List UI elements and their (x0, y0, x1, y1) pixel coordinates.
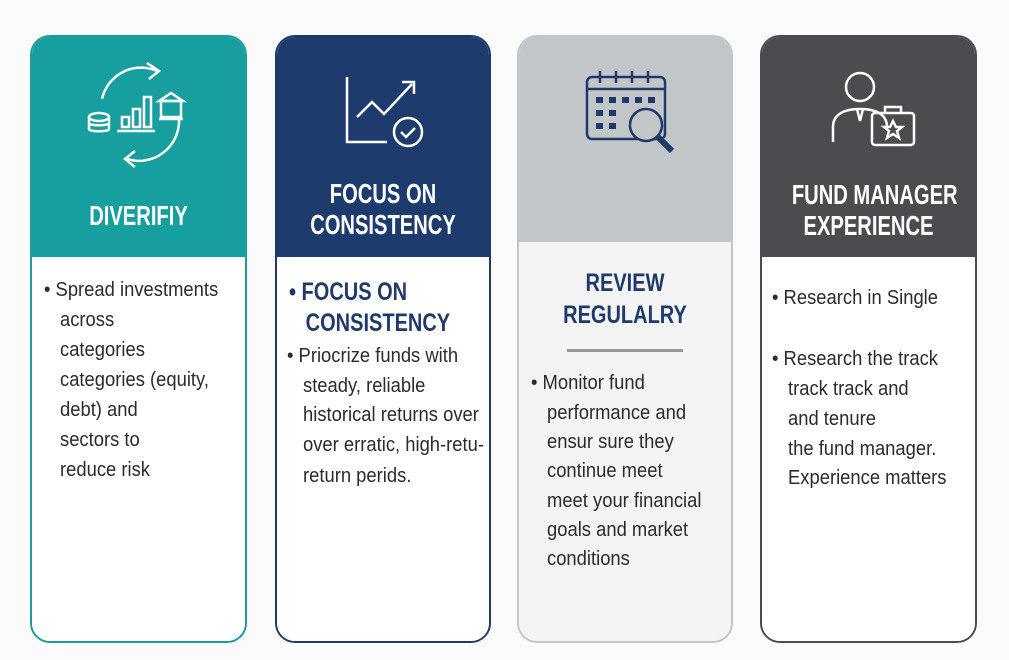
header: diversify (32, 37, 245, 257)
text: consistency body: return perids. (303, 465, 411, 487)
text: diversify body: across (60, 309, 114, 331)
text: fund manager body (762, 257, 975, 641)
text: review body: performance and (547, 402, 686, 424)
text: review body: conditions (547, 548, 630, 570)
icon: calendar magnifier (586, 71, 674, 154)
title: fund manager experience: EXPERIENCE (804, 210, 933, 241)
text: diversify body: • Spread investments (44, 279, 218, 301)
text: consistency body (277, 257, 489, 641)
panel: fund manager (760, 35, 977, 643)
title: focus on consistency: CONSISTENCY (310, 209, 456, 240)
text: review body: meet your financial (547, 490, 701, 512)
text: consistency body: • FOCUS ON (289, 278, 407, 306)
text: review body: ensur sure they (547, 431, 674, 453)
panel: diversify (30, 35, 247, 643)
text: diversify body: reduce risk (60, 459, 150, 481)
text: review body: REGULALRY (563, 301, 687, 329)
text: fund manager body: and tenure (788, 408, 876, 430)
title: focus on consistency: FOCUS ON (330, 178, 436, 209)
text: diversify body: categories (60, 339, 145, 361)
text: fund manager body: • Research in Single (772, 287, 938, 309)
text: consistency body: • Priocrize funds with (287, 345, 458, 367)
title: focus on consistency (310, 178, 456, 240)
icon: diversify cycle (88, 62, 187, 168)
title: diverifiy: DIVERIFIY (89, 200, 188, 231)
icon: manager with briefcase (832, 72, 916, 146)
header: review (519, 37, 731, 242)
text: fund manager body: Experience matters (788, 467, 947, 489)
title: fund manager experience: FUND MANAGER (792, 179, 958, 210)
text: consistency body: over erratic, high-retu- (303, 434, 484, 456)
text: consistency body: steady, reliable (303, 375, 425, 397)
text: consistency body: CONSISTENCY (306, 309, 450, 337)
panel: consistency (275, 35, 491, 643)
text: diversify body (32, 257, 245, 641)
text: fund manager body: track track and (788, 378, 909, 400)
header: consistency (277, 37, 489, 257)
text: review body (519, 242, 731, 641)
title: fund manager experience (792, 179, 958, 241)
text: diversify body: categories (equity, (60, 369, 209, 391)
text: diversify body: sectors to (60, 429, 140, 451)
text: consistency body: historical returns over (303, 404, 479, 426)
header: fund manager (762, 37, 975, 257)
text: fund manager body: the fund manager. (788, 438, 936, 460)
text: diversify body: debt) and (60, 399, 138, 421)
panel: review (517, 35, 733, 643)
text: review body: REVIEW (586, 269, 664, 297)
text: review body: • Monitor fund (531, 372, 645, 394)
text: fund manager body: • Research the track (772, 348, 938, 370)
text: review body: goals and market (547, 519, 688, 541)
text: review body: continue meet (547, 460, 663, 482)
icon: chart with check (346, 77, 424, 148)
